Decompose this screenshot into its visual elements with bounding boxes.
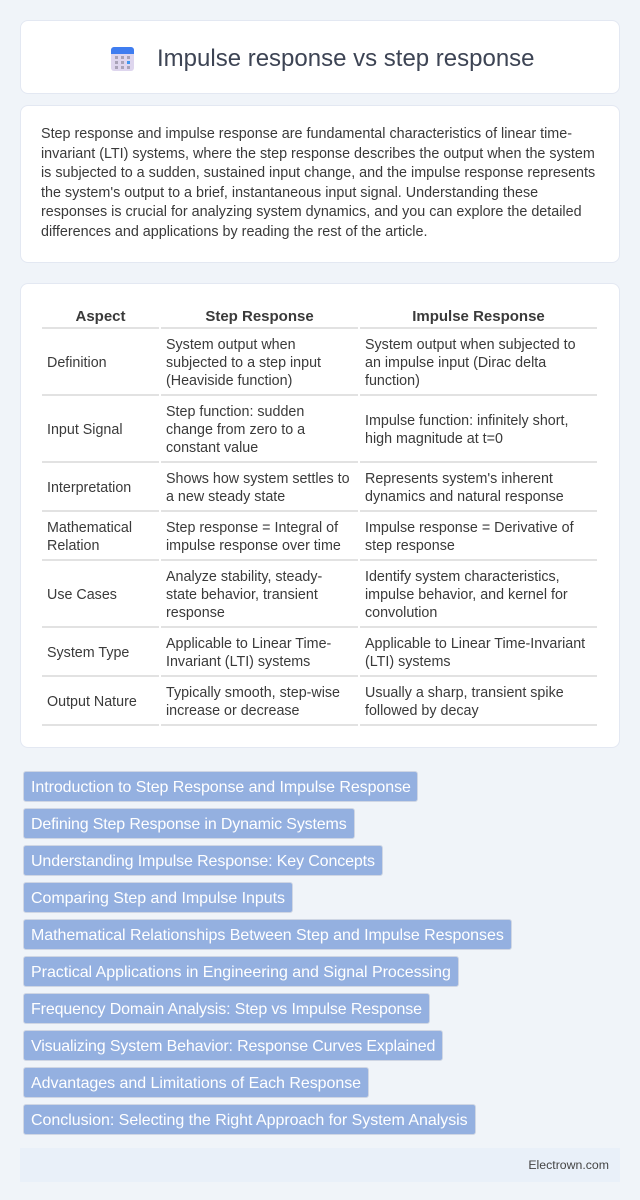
interpretation impulse: dynamics and natural response (365, 489, 564, 505)
footer (20, 1148, 620, 1182)
definition step: subjected to a step input (166, 355, 321, 371)
chip: practical: Practical Applications in Engineering and Signal Processing (31, 964, 451, 981)
input impulse: high magnitude at t=0 (365, 431, 503, 447)
output impulse: followed by decay (365, 703, 479, 719)
relation impulse (360, 512, 597, 561)
row: interpretation: Interpretation (47, 480, 131, 496)
icon: calendar (111, 47, 134, 71)
chip: defining (23, 808, 355, 839)
row: definition (42, 329, 159, 396)
output step (161, 677, 358, 726)
definition step: System output when (166, 337, 296, 353)
intro text: the system's output to a brief, instantaneous input signal. Understanding these (41, 185, 538, 201)
use cases impulse: convolution (365, 605, 437, 621)
input impulse (360, 396, 597, 463)
interpretation step (161, 463, 358, 512)
use cases impulse: impulse behavior, and kernel for (365, 587, 568, 603)
relation step: impulse response over time (166, 538, 341, 554)
system type impulse (360, 628, 597, 677)
row: system type: System Type (47, 645, 129, 661)
use cases step: state behavior, transient (166, 587, 318, 603)
system type step (161, 628, 358, 677)
title: Impulse response vs step response (157, 45, 535, 72)
header card (20, 20, 620, 94)
interpretation step: Shows how system settles to (166, 471, 350, 487)
footer credit: Electrown.com (528, 1158, 609, 1172)
row: input signal (42, 396, 159, 463)
system type step: Invariant (LTI) systems (166, 654, 310, 670)
relation impulse: step response (365, 538, 455, 554)
definition step: (Heaviside function) (166, 373, 292, 389)
row: definition: Definition (47, 355, 107, 371)
chip: visualizing: Visualizing System Behavior: Response Curves Explained (31, 1038, 435, 1055)
relation step (161, 512, 358, 561)
input impulse: Impulse function: infinitely short, (365, 413, 568, 429)
chip: mathematical: Mathematical Relationships Between Step and Impulse Responses (31, 927, 504, 944)
chip: advantages: Advantages and Limitations of Each Response (31, 1075, 361, 1092)
chip: practical (23, 956, 459, 987)
definition step (161, 329, 358, 396)
use cases step (161, 561, 358, 628)
intro text: is subjected to a sudden, sustained input change, and the impulse response represents (41, 165, 595, 181)
use cases impulse (360, 561, 597, 628)
output impulse (360, 677, 597, 726)
row: output nature (42, 677, 159, 726)
row: mathematical relation (42, 512, 159, 561)
row: use cases (42, 561, 159, 628)
chip: understanding (23, 845, 383, 876)
input step: change from zero to a (166, 422, 305, 438)
comparison table card (20, 283, 620, 748)
chip: comparing: Comparing Step and Impulse Inputs (31, 890, 285, 907)
system type impulse: Applicable to Linear Time-Invariant (365, 636, 585, 652)
chip: mathematical (23, 919, 512, 950)
interpretation impulse: Represents system's inherent (365, 471, 553, 487)
row: mathematical relation: Relation (47, 538, 99, 554)
row: interpretation (42, 463, 159, 512)
definition impulse: an impulse input (Dirac delta (365, 355, 546, 371)
interpretation step: a new steady state (166, 489, 285, 505)
chip: conclusion: Conclusion: Selecting the Right Approach for System Analysis (31, 1112, 468, 1129)
use cases step: response (166, 605, 225, 621)
table header: aspect (42, 304, 159, 329)
intro text: responses is crucial for analyzing system dynamics, and you can explore the detailed (41, 204, 582, 220)
row: mathematical relation: Mathematical (47, 520, 132, 536)
chip: understanding: Understanding Impulse Response: Key Concepts (31, 853, 375, 870)
chip: frequency: Frequency Domain Analysis: Step vs Impulse Response (31, 1001, 422, 1018)
definition impulse (360, 329, 597, 396)
chip: conclusion (23, 1104, 476, 1135)
row: output nature: Output Nature (47, 694, 137, 710)
chip: frequency (23, 993, 430, 1024)
relation impulse: Impulse response = Derivative of (365, 520, 574, 536)
input step (161, 396, 358, 463)
chip: introduction (23, 771, 418, 802)
intro card (20, 105, 620, 263)
table header: impulse response (360, 304, 597, 329)
chip: defining: Defining Step Response in Dynamic Systems (31, 816, 347, 833)
table header: step response: Step Response (205, 308, 314, 325)
chip: advantages (23, 1067, 369, 1098)
use cases impulse: Identify system characteristics, (365, 569, 560, 585)
chip: introduction: Introduction to Step Response and Impulse Response (31, 779, 411, 796)
intro text: invariant (LTI) systems, where the step response describes the output when the system (41, 146, 595, 162)
table header: impulse response: Impulse Response (412, 308, 545, 325)
intro text (41, 126, 595, 240)
definition impulse: System output when subjected to (365, 337, 576, 353)
system type impulse: (LTI) systems (365, 654, 451, 670)
system type step: Applicable to Linear Time- (166, 636, 331, 652)
table header: step response (161, 304, 358, 329)
input step: Step function: sudden (166, 404, 304, 420)
interpretation impulse (360, 463, 597, 512)
output step: Typically smooth, step-wise (166, 685, 340, 701)
intro text: differences and applications by reading the rest of the article. (41, 224, 427, 240)
row: system type (42, 628, 159, 677)
output step: increase or decrease (166, 703, 300, 719)
intro text: Step response and impulse response are fundamental characteristics of linear time- (41, 126, 572, 142)
input step: constant value (166, 440, 258, 456)
chip: comparing (23, 882, 293, 913)
table header: aspect: Aspect (75, 308, 126, 325)
row: use cases: Use Cases (47, 587, 117, 603)
use cases step: Analyze stability, steady- (166, 569, 322, 585)
output impulse: Usually a sharp, transient spike (365, 685, 564, 701)
chip: visualizing (23, 1030, 443, 1061)
relation step: Step response = Integral of (166, 520, 338, 536)
row: input signal: Input Signal (47, 422, 123, 438)
definition impulse: function) (365, 373, 420, 389)
